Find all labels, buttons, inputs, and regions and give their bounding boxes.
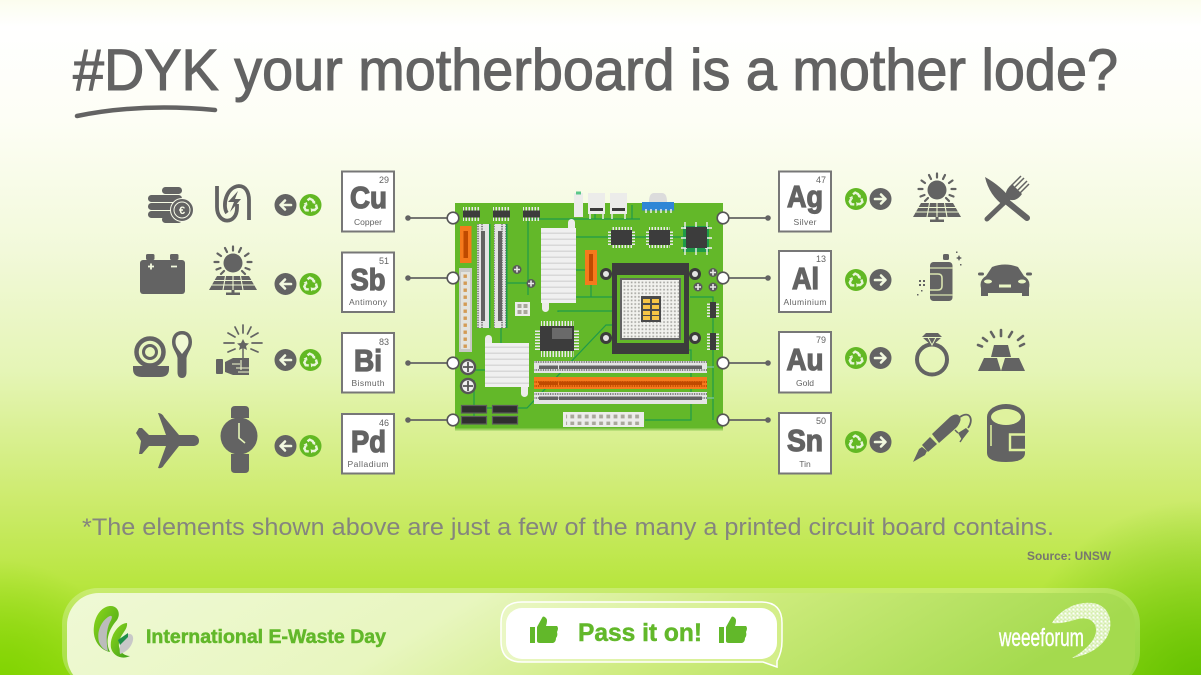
black connectors [462,406,518,424]
board screws [512,265,718,292]
element: tin: 50 [816,416,826,426]
board traces [473,205,714,420]
expansion slots [534,361,707,404]
logo text: International E-Waste Day [146,627,386,648]
element: silver: Ag [787,179,823,214]
CPU socket [600,263,701,354]
icon: coins: € [179,205,185,217]
connector lines [405,215,771,423]
title underline [77,108,215,116]
logo: weeeforum: weeeforum [998,624,1084,652]
icon: hand with sparkler [216,325,262,375]
element: antimony: Antimony [349,297,388,307]
logo: weeeforum [998,603,1110,658]
element: bismuth: Bismuth [352,378,385,388]
central chip [535,321,579,357]
memory slots vertical [477,224,508,328]
recycle and arrow badges left [274,194,322,457]
icon: coins [148,187,194,223]
icon: wristwatch [220,406,258,473]
element: aluminium [779,251,831,312]
QFP chips [608,222,712,255]
icon: aluminium can [917,252,962,301]
icon: airplane [136,413,199,468]
element: antimony [342,252,394,312]
icon: thumbs up left [530,616,558,643]
orange connector [460,226,472,263]
heat sink top [541,219,576,312]
icon: knife and fork [985,176,1029,219]
element: gold: Gold [796,378,814,388]
element: silver: 47 [816,175,826,185]
small side chips [707,302,719,350]
element: bismuth: 83 [379,337,389,347]
element: copper: Copper [354,217,382,227]
recycle and arrow badges right [845,188,892,453]
icon: battery [140,254,185,294]
small white connector [515,302,530,316]
element: tin [779,413,831,474]
panel: motherboard [405,192,771,430]
icon: solar panel right [913,174,961,222]
element: copper: Cu [350,180,387,215]
element: aluminium: Al [792,261,819,296]
element: gold: 79 [816,335,826,345]
connection nodes [447,212,729,426]
icon: car [978,264,1032,296]
icon: diamond ring [917,333,947,374]
element: gold [779,332,831,392]
top chips [463,207,540,221]
footnote: *The elements shown above are just a few of the many a printed circuit board contains. [82,514,1054,541]
element: copper: 29 [379,175,389,185]
call to action text: Pass it on! [578,619,702,647]
element: palladium: Palladium [348,459,388,469]
element: palladium [342,414,394,474]
second orange connector [585,250,597,285]
element: antimony: 51 [379,256,389,266]
element: aluminium: Aluminium [784,297,826,307]
IDE connector [459,268,472,352]
large screws [461,360,475,393]
element: aluminium: 13 [816,254,826,264]
heat sink bottom [485,335,529,397]
element: palladium: 46 [379,418,389,428]
bottom right glow [900,480,1201,675]
footer panel [62,588,1140,675]
call to action bubble [501,602,782,667]
element: bismuth: Bi [354,343,382,378]
element: bismuth [342,333,394,392]
logo: international e-waste day [94,606,133,658]
top ports [574,192,674,219]
element: silver: Silver [794,217,817,227]
element: gold: Au [786,342,824,377]
white power connector [563,412,644,427]
icon: plate and spoon [133,331,192,378]
element: tin: Tin [799,459,811,469]
icon: solar panel left [209,246,257,295]
element: silver [779,172,831,232]
circuit board base [455,203,723,430]
icon: thumbs up right [719,616,747,643]
element: antimony: Sb [350,262,386,297]
bottom left glow [0,540,200,675]
icon: copper cable [217,186,249,221]
source: Source: UNSW [1027,549,1112,563]
element: palladium: Pd [351,424,386,459]
icon: tin can [987,404,1025,462]
title: #DYK your motherboard is a mother lode? [73,38,1118,103]
element: copper [342,172,394,232]
icon: gold bars [978,330,1025,371]
element: tin: Sn [787,423,823,458]
icon: soldering iron [913,414,971,462]
